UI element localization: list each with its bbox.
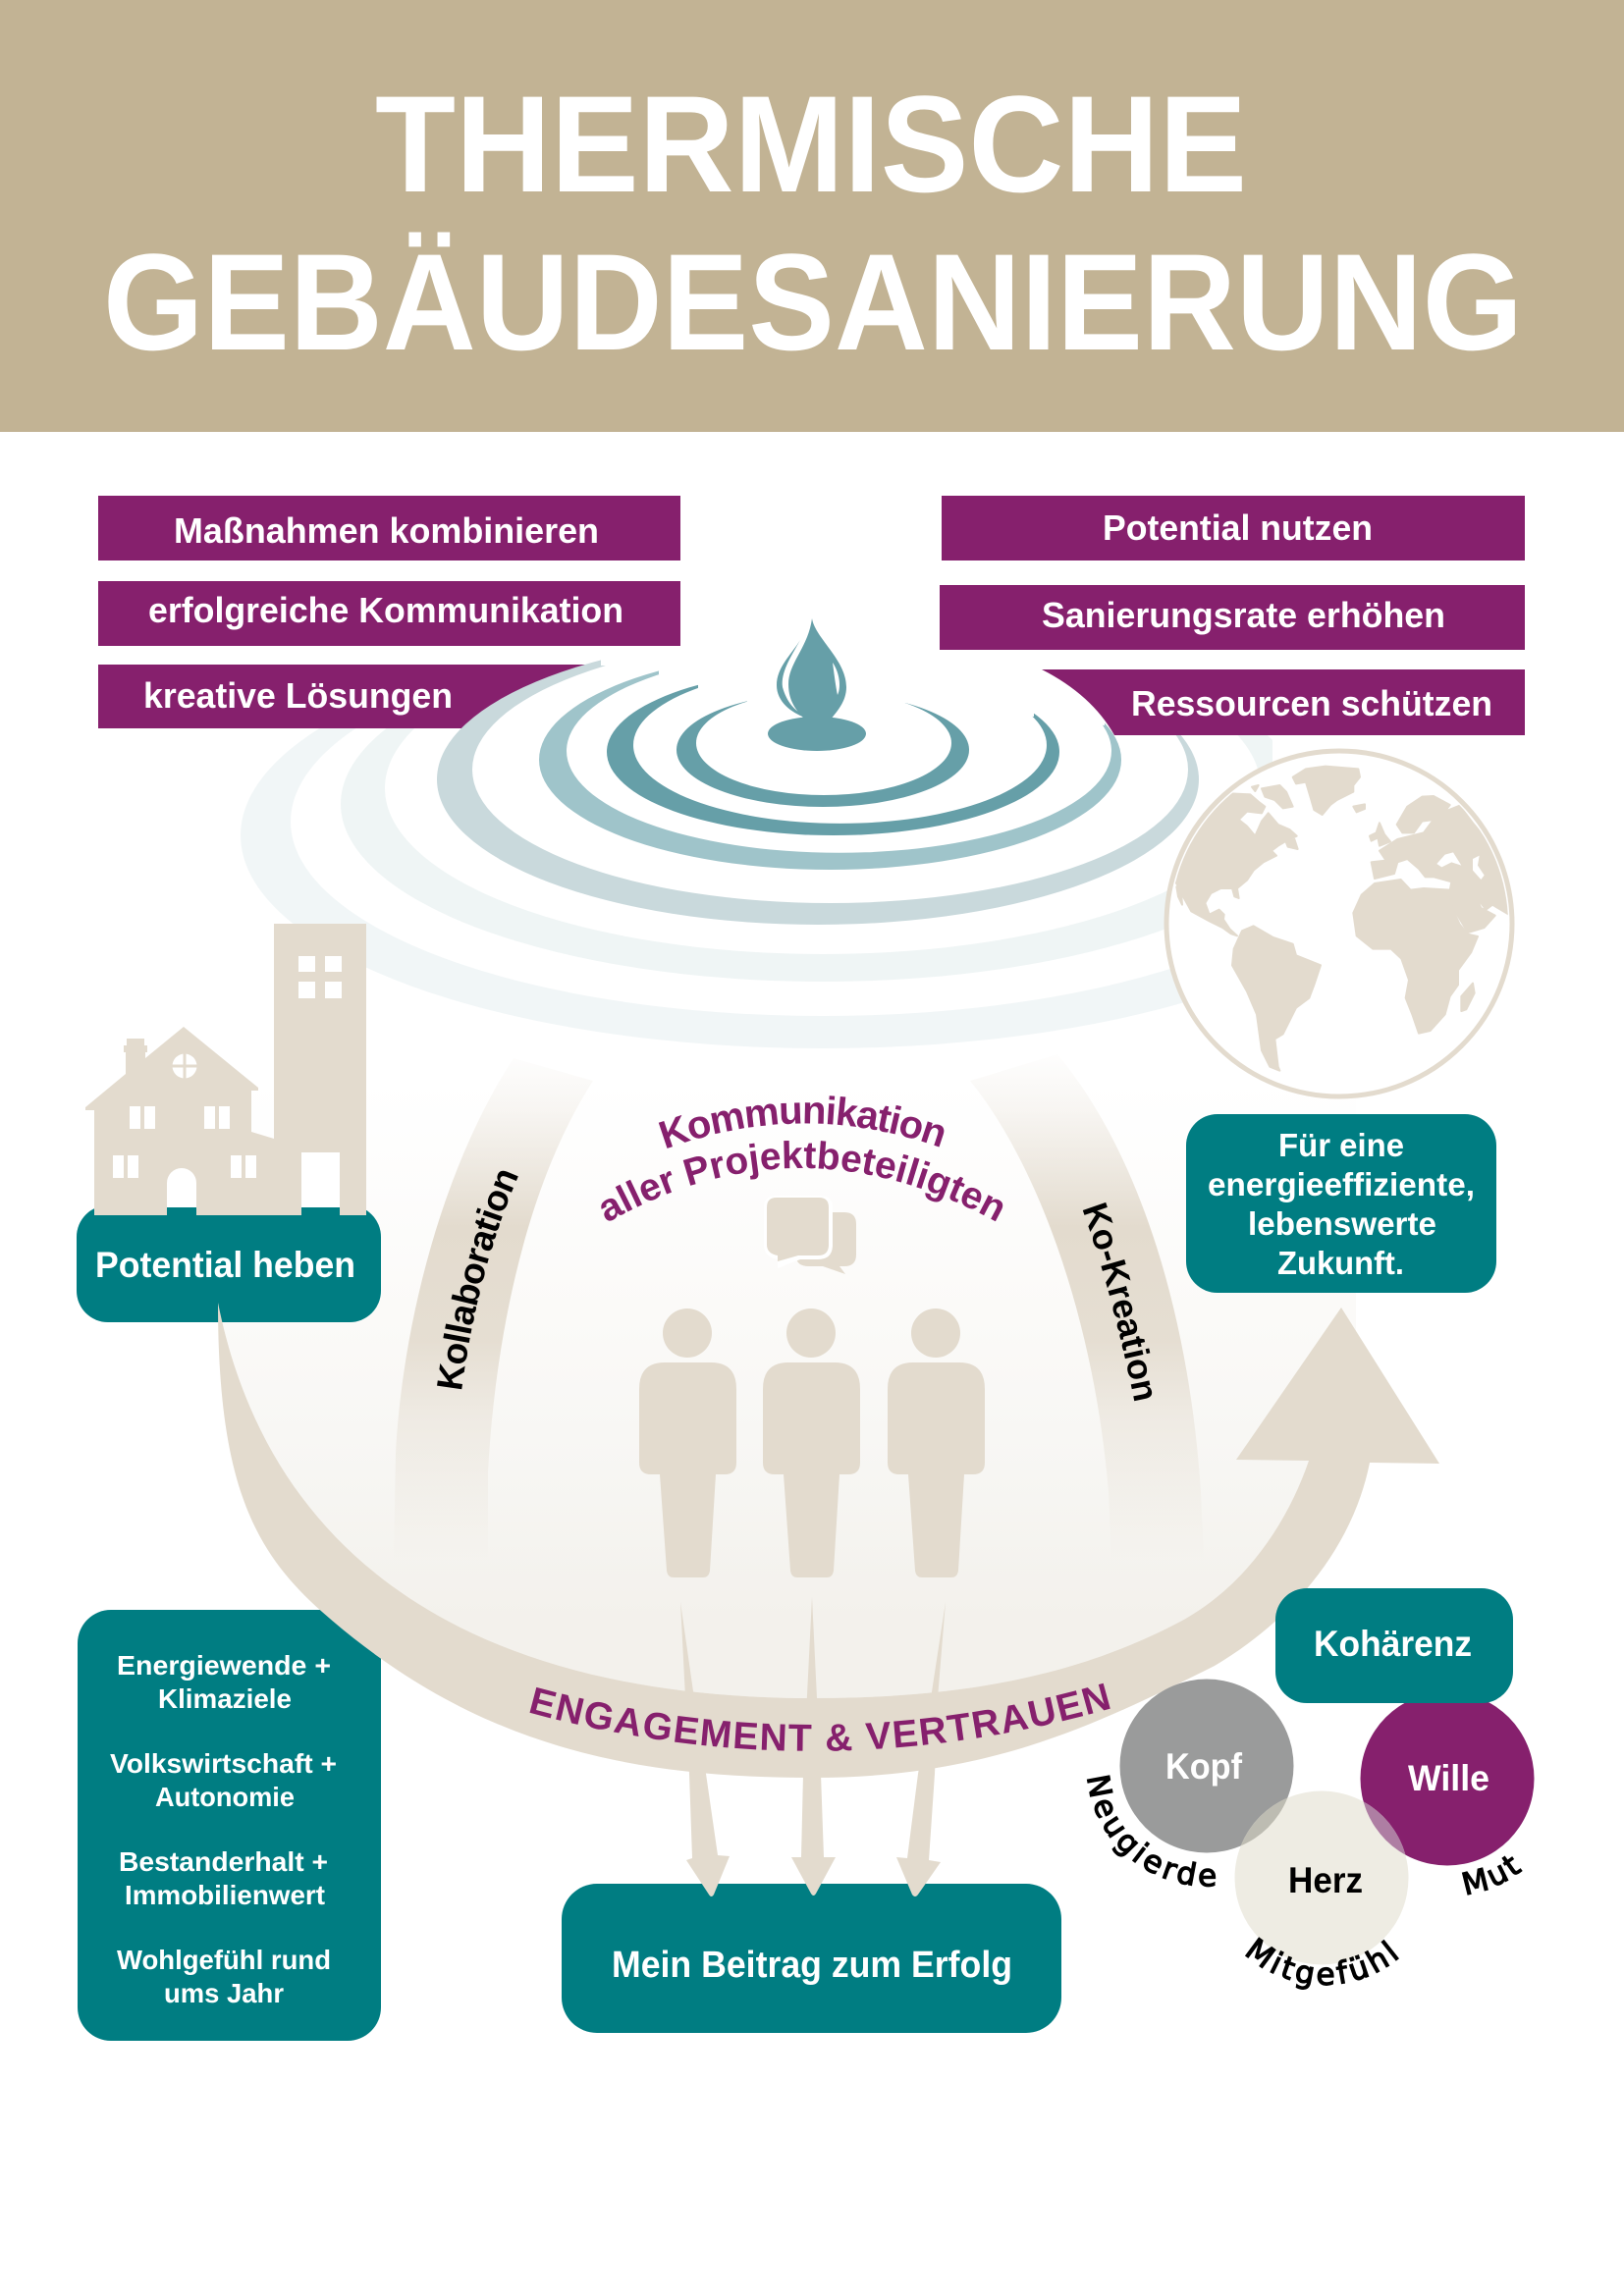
box: motivation list xyxy=(78,1610,381,2041)
title: THERMISCHE xyxy=(375,67,1247,221)
people group xyxy=(639,1308,985,1577)
box: Mein Beitrag zum Erfolg: Mein Beitrag zum Erfolg xyxy=(612,1945,1012,1986)
goal bar: Potential nutzen: Potential nutzen xyxy=(1103,507,1373,548)
icon: house and tower xyxy=(85,924,366,1215)
goal bar: erfolgreiche Kommunikation xyxy=(98,581,680,646)
circle: Kopf: Kopf xyxy=(1165,1746,1243,1787)
box: motivation list: Klimaziele xyxy=(158,1683,292,1714)
arch: Ko-Kreation xyxy=(970,1054,1204,1561)
person 1 xyxy=(639,1308,736,1577)
box: motivation list: ums Jahr xyxy=(164,1978,284,2008)
icon: speech bubbles xyxy=(764,1196,856,1274)
circle: Wille: Wille xyxy=(1408,1758,1489,1798)
outer water ripples xyxy=(0,433,1624,1048)
goal bar: Sanierungsrate erhöhen xyxy=(940,585,1525,650)
box: motivation list: Bestanderhalt + xyxy=(119,1846,328,1877)
box: Kohärenz xyxy=(1275,1588,1513,1703)
box: Kohärenz: Kohärenz xyxy=(1314,1624,1472,1664)
box: energy-efficient future: energieeffiziente, xyxy=(1208,1166,1475,1202)
swoosh arrow: Engagement und Vertrauen xyxy=(218,1303,1439,1778)
arrows into contribution box xyxy=(680,1597,946,1896)
header band with title xyxy=(0,0,1624,432)
box: motivation list: Wohlgefühl rund xyxy=(117,1945,331,1975)
box: motivation list: Volkswirtschaft + xyxy=(110,1748,337,1779)
label: Ko-Kreation: Ko-Kreation xyxy=(1082,1201,1153,1402)
arrow 2 xyxy=(791,1597,836,1896)
arrow 3 xyxy=(896,1602,946,1896)
person 2 xyxy=(763,1308,860,1577)
box: energy-efficient future: lebenswerte xyxy=(1248,1205,1436,1242)
inner water ripples xyxy=(437,618,1208,925)
circle: Herz xyxy=(1235,1790,1408,1965)
box: Mein Beitrag zum Erfolg xyxy=(562,1884,1061,2033)
goal bar: Ressourcen schützen xyxy=(1042,669,1525,735)
icon: globe xyxy=(1166,751,1512,1096)
icon: water drop xyxy=(768,618,866,751)
arrow 1 xyxy=(680,1602,730,1896)
box: energy-efficient future: Für eine xyxy=(1278,1127,1404,1163)
goal bar: Maßnahmen kombinieren xyxy=(98,496,680,561)
arch: Kollaboration xyxy=(394,1058,593,1561)
circle: Wille xyxy=(1361,1692,1534,1865)
box: Potential heben: Potential heben xyxy=(95,1245,355,1285)
goal bar: erfolgreiche Kommunikation: erfolgreiche Kommunikation xyxy=(148,590,623,630)
box: motivation list: Autonomie xyxy=(155,1782,295,1812)
label: Mut: Mut xyxy=(1461,1855,1523,1896)
heading: aller Projektbeteiligten: aller Projektbeteiligten xyxy=(601,1141,1003,1221)
heading: Kommunikation: Kommunikation xyxy=(658,1095,945,1148)
box: energy-efficient future: Zukunft. xyxy=(1277,1245,1404,1281)
box: energy-efficient future xyxy=(1186,1114,1496,1293)
circle: Herz: Herz xyxy=(1288,1860,1363,1900)
label: Neugierde: Neugierde xyxy=(1086,1775,1216,1887)
label: Mitgefühl: Mitgefühl xyxy=(1245,1937,1399,1990)
title: GEBÄUDESANIERUNG xyxy=(103,225,1523,379)
box: Potential heben xyxy=(77,1205,381,1322)
box: motivation list: Immobilienwert xyxy=(125,1880,325,1910)
goal bar: Potential nutzen xyxy=(942,496,1525,561)
bowl background xyxy=(218,1041,1356,1698)
box: motivation list: Energiewende + xyxy=(117,1650,331,1681)
goal bar: kreative Lösungen xyxy=(98,665,628,728)
goal bar: Sanierungsrate erhöhen: Sanierungsrate erhöhen xyxy=(1042,595,1445,635)
title xyxy=(103,67,1523,379)
goal bar: Ressourcen schützen: Ressourcen schützen xyxy=(1131,683,1492,723)
goal bar: kreative Lösungen: kreative Lösungen xyxy=(143,675,453,716)
label: Engagement und Vertrauen: ENGAGEMENT & VERTRAUEN xyxy=(530,1682,1110,1751)
circle: Kopf xyxy=(1119,1679,1294,1853)
person 3 xyxy=(888,1308,985,1577)
label: Kollaboration: Kollaboration xyxy=(437,1170,518,1390)
goal bar: Maßnahmen kombinieren: Maßnahmen kombinieren xyxy=(174,510,599,551)
